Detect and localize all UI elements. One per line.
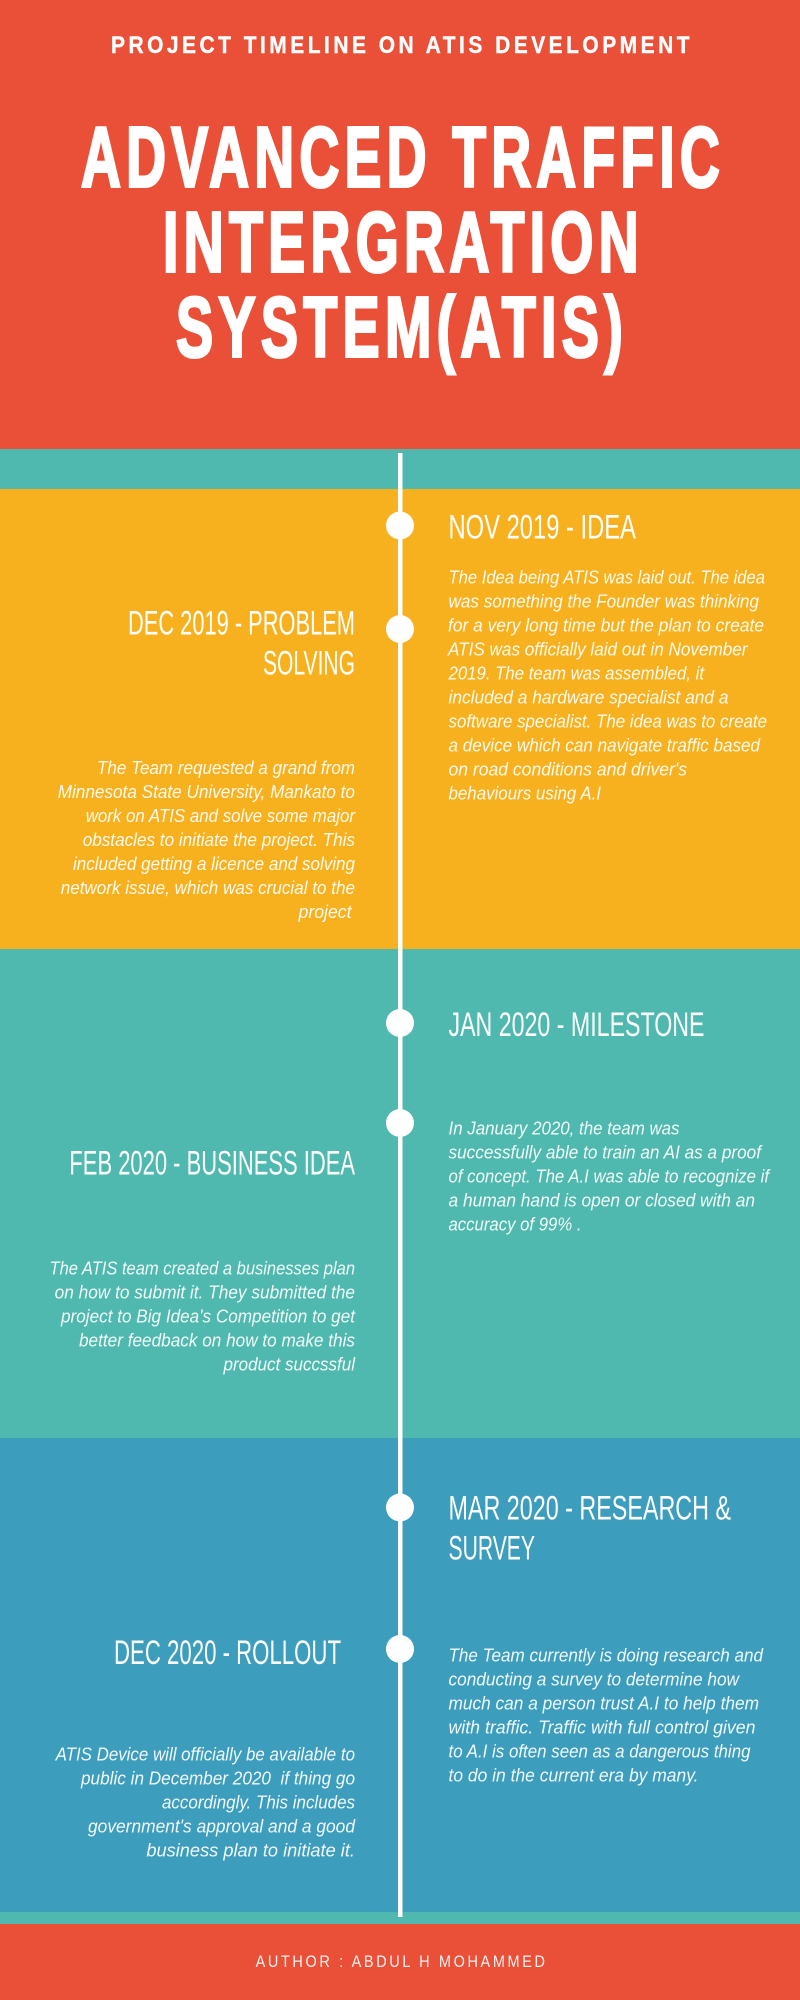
timeline marker: Dec 2019 [386, 615, 414, 643]
heading: SOLVING [263, 645, 355, 683]
title [81, 111, 725, 376]
body text: ATIS was officially laid out in November [447, 638, 748, 659]
body text: The Team requested a grand from [97, 757, 355, 778]
body text: behaviours using A.I [448, 782, 601, 803]
body text: on road conditions and driver's [448, 758, 687, 779]
body text: The Team currently is doing research and [448, 1644, 764, 1665]
body text: The Idea being ATIS was laid out. The idea [448, 566, 765, 587]
body text: obstacles to initiate the project. This [83, 829, 355, 850]
body text: 2019. The team was assembled, it [448, 662, 705, 683]
body text: included a hardware specialist and a [448, 686, 728, 707]
panel: footer [0, 1924, 800, 2000]
timeline marker: Mar 2020 [386, 1494, 414, 1522]
body text: software specialist. The idea was to create [448, 710, 767, 731]
body text: to A.I is often seen as a dangerous thing [448, 1740, 751, 1761]
entry: Mar 2020 research and survey [448, 1490, 764, 1785]
body text: In January 2020, the team was [448, 1117, 680, 1138]
timeline vertical line [398, 453, 402, 1917]
timeline marker: Nov 2019 [386, 512, 414, 540]
body text: business plan to initiate it. [146, 1839, 355, 1860]
heading: FEB 2020 - BUSINESS IDEA [69, 1145, 355, 1183]
entry: Dec 2020 rollout [55, 1634, 356, 1860]
body text: The ATIS team created a businesses plan [50, 1257, 355, 1278]
heading [448, 1490, 731, 1568]
entry: Dec 2019 problem solving [58, 605, 356, 922]
heading [128, 605, 355, 683]
heading: DEC 2020 - ROLLOUT [114, 1634, 341, 1672]
body text [50, 1257, 356, 1374]
entry: Nov 2019 idea [447, 508, 767, 803]
body text: government's approval and a good [88, 1815, 356, 1836]
timeline marker: Jan 2020 [386, 1009, 414, 1037]
heading: NOV 2019 - IDEA [448, 508, 636, 546]
body text [55, 1743, 356, 1860]
timeline marker: Dec 2020 [386, 1635, 414, 1663]
body text: project [298, 901, 352, 922]
body text: of concept. The A.I was able to recognize if [448, 1165, 771, 1186]
body text: ATIS Device will officially be available to [55, 1743, 355, 1764]
body text: a human hand is open or closed with an [448, 1189, 755, 1210]
body text: a device which can navigate traffic based [448, 734, 761, 755]
body text: accuracy of 99% . [448, 1213, 582, 1234]
body text: with traffic. Traffic with full control given [448, 1716, 756, 1737]
body text: on how to submit it. They submitted the [55, 1281, 355, 1302]
body text: was something the Founder was thinking [448, 590, 760, 611]
body text [447, 566, 767, 803]
body text: for a very long time but the plan to create [448, 614, 764, 635]
body text: public in December 2020 if thing go [80, 1767, 355, 1788]
panel: orange section [0, 489, 800, 949]
timeline marker: Feb 2020 [386, 1109, 414, 1137]
body text: better feedback on how to make this [79, 1329, 355, 1350]
body text: accordingly. This includes [162, 1791, 355, 1812]
body text: to do in the current era by many. [448, 1764, 698, 1785]
body text: included getting a licence and solving [73, 853, 356, 874]
body text: successfully able to train an AI as a proof [448, 1141, 763, 1162]
panel: header [0, 0, 800, 449]
body text: work on ATIS and solve some major [86, 805, 356, 826]
entry: Jan 2020 milestone [448, 1006, 771, 1234]
heading: DEC 2019 - PROBLEM [128, 605, 355, 643]
body text: product succssful [223, 1353, 356, 1374]
panel: page background teal [0, 449, 800, 1924]
entry: Feb 2020 business idea [50, 1145, 356, 1374]
panel: blue section [0, 1438, 800, 1912]
body text [58, 757, 356, 922]
body text: Minnesota State University, Mankato to [58, 781, 355, 802]
body text: network issue, which was crucial to the [61, 877, 355, 898]
subtitle: PROJECT TIMELINE ON ATIS DEVELOPMENT [111, 32, 693, 59]
body text [448, 1117, 771, 1234]
body text [448, 1644, 764, 1785]
author credit: AUTHOR : ABDUL H MOHAMMED [256, 1953, 548, 1971]
body text: much can a person trust A.I to help them [448, 1692, 759, 1713]
heading: SURVEY [448, 1530, 535, 1568]
body text: conducting a survey to determine how [448, 1668, 741, 1689]
body text: project to Big Idea's Competition to get [60, 1305, 356, 1326]
